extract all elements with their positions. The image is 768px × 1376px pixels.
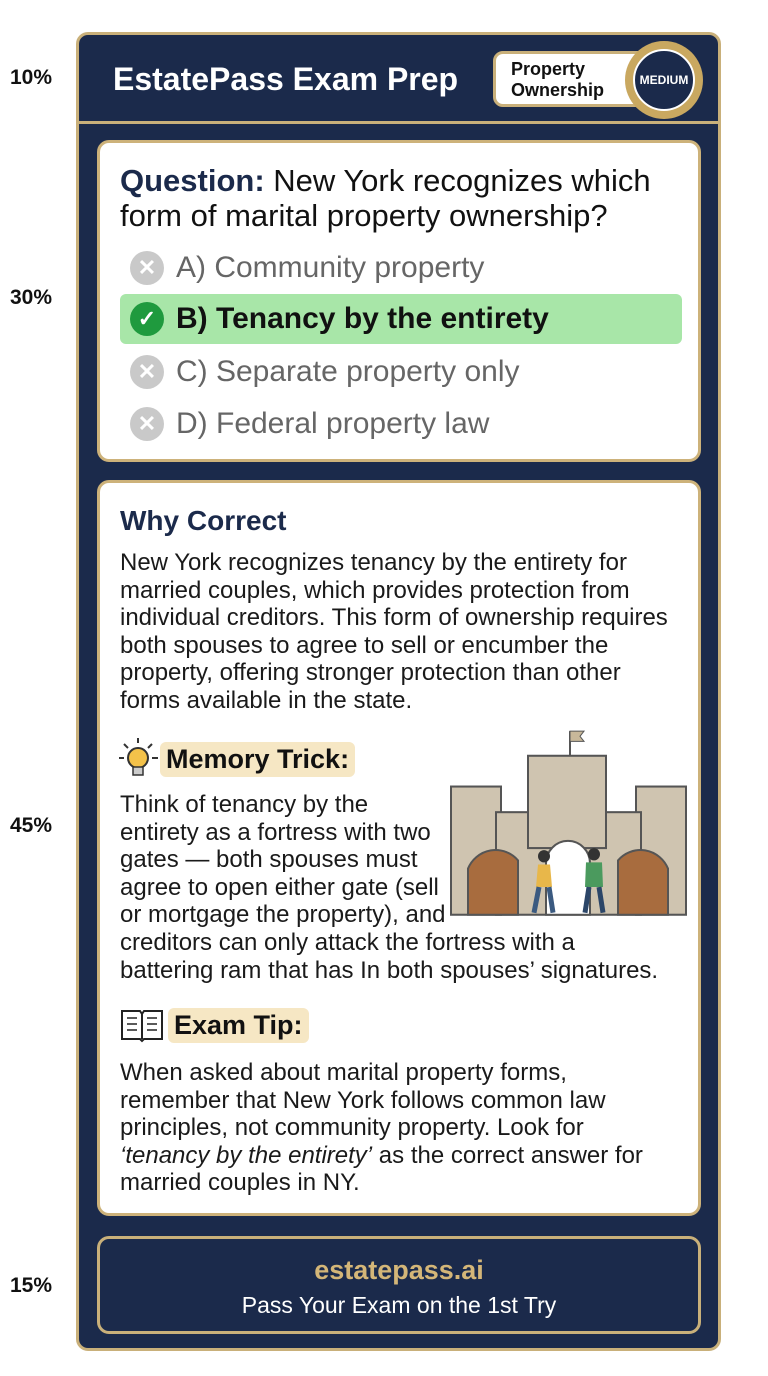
exam tip text	[120, 1059, 643, 1196]
explanation text: New York recognizes tenancy by the entirety for	[120, 549, 627, 576]
category badge	[493, 51, 653, 107]
memory trick text: entirety as a fortress with two	[120, 819, 431, 846]
option A: ✕	[138, 255, 156, 280]
memory trick text: agree to open either gate (sell	[120, 874, 439, 901]
option B correct: B) Tenancy by the entirety	[176, 302, 549, 335]
option A: A) Community property	[176, 251, 484, 284]
memory trick text: creditors can only attack the fortress with a	[120, 929, 575, 956]
explanation text: property, offering stronger protection than other	[120, 659, 621, 686]
title: EstatePass Exam Prep	[113, 61, 458, 97]
explanation text: both spouses to agree to sell or encumber the	[120, 632, 608, 659]
option C: C) Separate property only	[176, 355, 520, 388]
exam tip text: ‘tenancy by the entirety’ as the correct answer for	[120, 1142, 643, 1169]
heading why correct: Why Correct	[120, 505, 286, 536]
memory trick text	[120, 791, 658, 984]
explanation text: individual creditors. This form of ownership requires	[120, 604, 668, 631]
exam tip heading: Exam Tip:	[174, 1010, 303, 1040]
exam tip text: remember that New York follows common law	[120, 1087, 606, 1114]
question text: form of marital property ownership?	[120, 198, 608, 233]
option C: ✕	[138, 359, 156, 384]
percent label 10%: 10%	[10, 66, 52, 89]
category badge: Ownership	[511, 80, 604, 100]
question text: Question: New York recognizes which	[120, 163, 651, 198]
difficulty seal	[625, 41, 703, 119]
option D: D) Federal property law	[176, 407, 489, 440]
footer tagline: Pass Your Exam on the 1st Try	[242, 1292, 556, 1318]
illustration: castle with couple	[450, 730, 687, 916]
question text	[120, 163, 651, 233]
explanation text	[120, 549, 668, 714]
category badge: Property	[511, 59, 585, 79]
option B correct: ✓	[138, 306, 156, 331]
memory trick heading: Memory Trick:	[166, 744, 349, 774]
exam tip text: principles, not community property. Look for	[120, 1114, 584, 1141]
explanation text: married couples, which provides protection from	[120, 577, 630, 604]
percent label 30%: 30%	[10, 286, 52, 309]
memory trick text: battering ram that has In both spouses’ signatures.	[120, 957, 658, 984]
exam tip text: When asked about marital property forms,	[120, 1059, 567, 1086]
option D: ✕	[138, 411, 156, 436]
panel: explanation	[97, 480, 701, 1216]
panel: question	[97, 140, 701, 462]
exam tip text: married couples in NY.	[120, 1169, 360, 1196]
explanation text: forms available in the state.	[120, 687, 412, 714]
footer brand: estatepass.ai	[314, 1255, 484, 1285]
memory trick heading	[119, 738, 355, 777]
memory trick text: gates — both spouses must	[120, 846, 418, 873]
exam tip heading	[121, 1008, 309, 1043]
icon: lightbulb	[119, 738, 158, 776]
icon: open book	[121, 1010, 163, 1042]
percent label 15%: 15%	[10, 1274, 52, 1297]
percent label 45%: 45%	[10, 814, 52, 837]
difficulty seal: MEDIUM	[640, 73, 688, 87]
option B correct	[120, 294, 682, 344]
memory trick text: or mortgage the property), and	[120, 901, 446, 928]
footer	[97, 1236, 701, 1334]
memory trick text: Think of tenancy by the	[120, 791, 368, 818]
